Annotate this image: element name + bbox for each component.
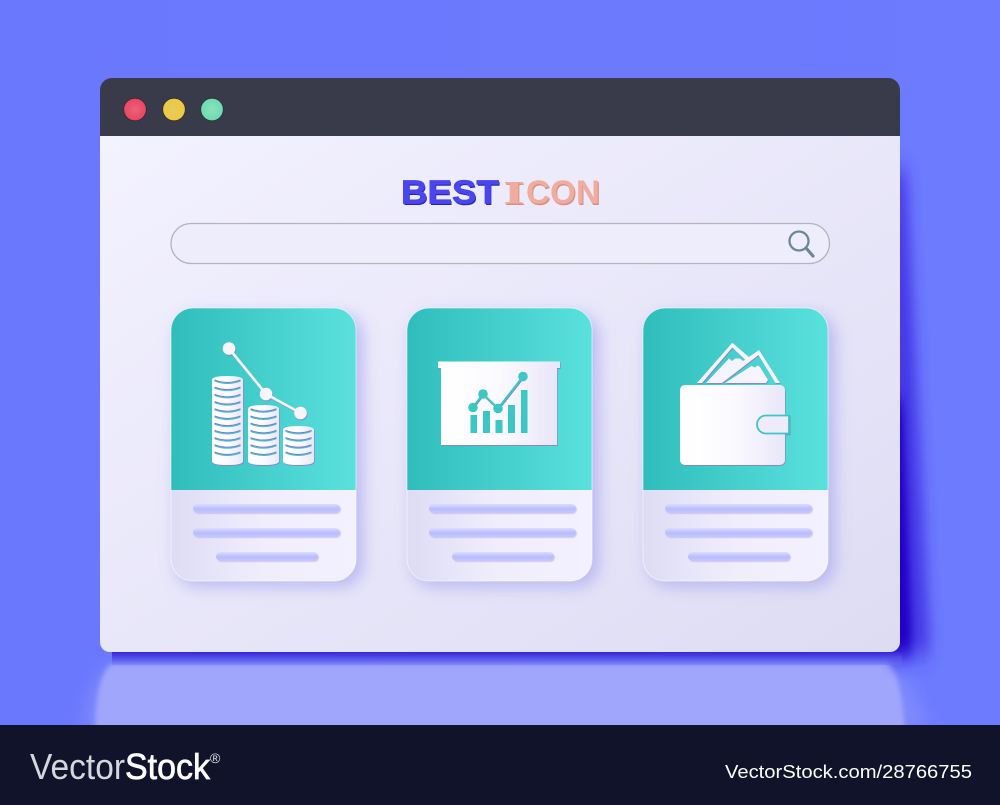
- coin stack short: [283, 426, 314, 465]
- coin stack medium: [248, 405, 279, 465]
- logo: VectorStock: Stock: [125, 746, 211, 787]
- text placeholder lines: [429, 504, 576, 561]
- title word: ICON: CON: [527, 175, 601, 212]
- title word: ICON: CON: [526, 174, 600, 210]
- traffic light: red: [124, 98, 146, 121]
- text placeholder lines: [193, 504, 340, 561]
- window shadow: [112, 170, 930, 665]
- traffic light: yellow: [163, 98, 185, 121]
- panel: wallet card: [643, 308, 828, 581]
- title word: BEST: BEST: [402, 175, 500, 212]
- text placeholder lines: [665, 504, 812, 561]
- floor reflection: [82, 664, 930, 730]
- trend line: [223, 342, 307, 419]
- logo: VectorStock: [30, 746, 221, 787]
- title word: ICON: I: [503, 176, 525, 212]
- panel: coins card: [171, 308, 356, 581]
- icon: presentation board: [438, 362, 560, 445]
- image id: VectorStock.com/28766755: [725, 761, 972, 782]
- logo: VectorStock: ®: [210, 750, 221, 766]
- search bar: [171, 224, 830, 264]
- title bar: [100, 78, 900, 136]
- logo: VectorStock: Vector: [30, 746, 125, 787]
- icon: falling coin stacks with line: [212, 342, 314, 465]
- wallet body: [680, 385, 785, 465]
- title word: ICON: I: [504, 177, 526, 213]
- board: [438, 362, 560, 445]
- window body: [100, 136, 900, 652]
- coin stack tall: [212, 376, 243, 465]
- traffic light: green: [201, 98, 223, 121]
- footer bar: [0, 725, 1000, 805]
- panel: presentation chart card: [407, 308, 592, 581]
- icon: wallet with banknotes: [680, 343, 789, 465]
- card shadows: [176, 314, 835, 587]
- title word: BEST: BEST: [401, 174, 499, 210]
- browser window: [100, 78, 900, 652]
- icon: magnifier: [790, 232, 813, 256]
- banknotes: [697, 343, 780, 383]
- title: BEST ICON: [401, 174, 601, 213]
- wallet clasp: [757, 416, 789, 434]
- bars: [470, 390, 528, 433]
- trend line: [468, 372, 528, 413]
